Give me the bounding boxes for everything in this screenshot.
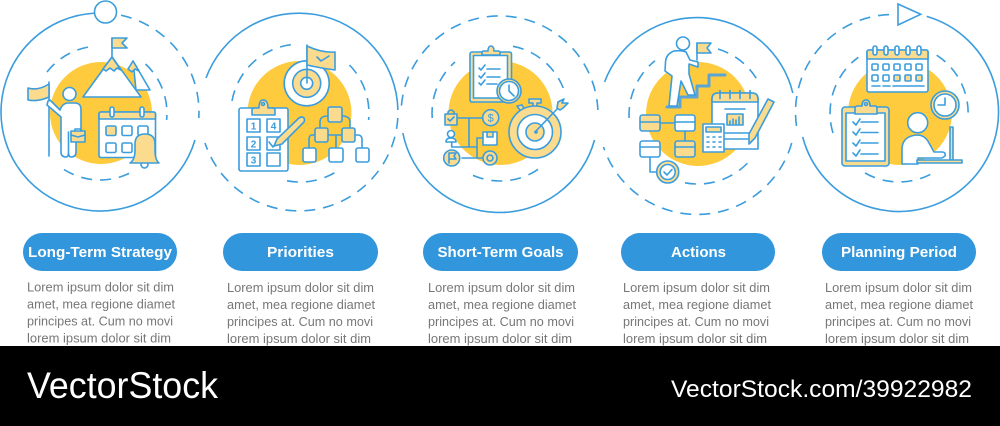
icon: hierarchy tree (303, 107, 369, 162)
text block: actions: amet, mea regione diamet (623, 297, 771, 312)
text block: priorities: amet, mea regione diamet (227, 297, 375, 312)
icon: person at laptop (902, 113, 962, 164)
label: priorities: Priorities (267, 244, 334, 261)
inner dashed ring (830, 55, 968, 182)
label: priorities (223, 233, 378, 271)
text block: priorities (227, 280, 375, 346)
text block: priorities: Lorem ipsum dolor sit dim (227, 280, 374, 295)
label: actions (621, 233, 775, 271)
icon: numbered checklist clipboard (239, 100, 288, 171)
inner dashed ring (232, 44, 369, 182)
panel: actions (604, 18, 793, 214)
icon: numbered checklist clipboard: 3 (251, 156, 257, 166)
text block: planning period: amet, mea regione diamet (825, 297, 973, 312)
icon: pencil (749, 99, 774, 144)
panel: long-term strategy (1, 1, 199, 211)
text block: long-term strategy: principes at. Cum no movi (27, 314, 173, 328)
label: actions: Actions (671, 244, 726, 261)
icon: stopwatch target with arrow (509, 99, 568, 158)
outer ring (401, 16, 598, 212)
icon: numbered checklist clipboard: 1 (251, 122, 257, 132)
text block: actions: Lorem ipsum dolor sit dim (623, 280, 770, 295)
icon: linked business items: $ (488, 112, 494, 124)
label: short-term goals: Short-Term Goals (438, 244, 564, 261)
icon: mountains with flag (83, 38, 150, 97)
icon: clipboard with clock (470, 46, 521, 103)
text block: priorities: lorem ipsum dolor sit dim (227, 331, 371, 346)
icon: pen (274, 117, 304, 146)
icon: checklist clipboard (842, 100, 889, 166)
icon: target with flag (284, 45, 335, 106)
icon: stairs (667, 75, 725, 107)
text block: long-term strategy (27, 280, 175, 346)
footer band (0, 346, 1000, 426)
label: long-term strategy: Long-Term Strategy (28, 244, 173, 261)
step marker triangle (898, 4, 921, 25)
icon: numbered checklist clipboard: 4 (271, 122, 277, 132)
step marker circle (94, 1, 116, 23)
text block: short-term goals: principes at. Cum no movi (428, 314, 574, 329)
yellow backdrop circle (646, 62, 750, 166)
inner dashed ring (432, 46, 564, 181)
panel: priorities (205, 13, 398, 211)
yellow backdrop circle (848, 61, 952, 165)
outer ring (796, 15, 998, 211)
text block: actions (623, 280, 771, 346)
icon: flow chart with check (640, 115, 695, 183)
icon: calendar report (712, 90, 758, 149)
text block: long-term strategy: lorem ipsum dolor sit dim (27, 330, 171, 346)
yellow backdrop circle (448, 61, 552, 165)
yellow backdrop circle (50, 62, 152, 164)
text block: short-term goals: lorem ipsum dolor sit dim (428, 331, 572, 346)
icon: person climbing with flag (665, 37, 711, 106)
yellow backdrop circle (248, 61, 352, 165)
icon: calendar (99, 107, 156, 158)
icon: calculator (703, 124, 724, 152)
outer ring (604, 18, 793, 214)
label: short-term goals (423, 233, 578, 271)
footer brand wordmark: VectorStock (27, 365, 218, 406)
text block: planning period: principes at. Cum no movi (825, 314, 971, 329)
outer ring (1, 13, 199, 211)
inner dashed ring (629, 49, 757, 184)
text block: actions: lorem ipsum dolor sit dim (623, 331, 767, 346)
text block: short-term goals (428, 280, 576, 346)
icon: numbered checklist clipboard: 2 (251, 140, 257, 150)
text block: priorities: principes at. Cum no movi (227, 314, 373, 329)
text block: planning period (825, 280, 973, 346)
text block: short-term goals: Lorem ipsum dolor sit dim (428, 280, 575, 295)
text block: planning period: Lorem ipsum dolor sit dim (825, 280, 972, 295)
label: planning period (822, 233, 976, 271)
footer image id: VectorStock.com/39922982 (671, 376, 972, 403)
label: planning period: Planning Period (841, 244, 957, 261)
text block: actions: principes at. Cum no movi (623, 314, 769, 329)
icon: linked business items (444, 110, 499, 166)
icon: calendar (867, 46, 928, 92)
panel: planning period (796, 4, 998, 211)
icon: person with flag (28, 82, 85, 157)
icon: wall clock (931, 91, 959, 119)
text block: long-term strategy: Lorem ipsum dolor sit dim (27, 280, 174, 294)
label: long-term strategy (23, 233, 177, 271)
text block: short-term goals: amet, mea regione diamet (428, 297, 576, 312)
text block: planning period: lorem ipsum dolor sit dim (825, 331, 969, 346)
panel: short-term goals (401, 16, 598, 212)
text block: long-term strategy: amet, mea regione diamet (27, 296, 175, 312)
inner dashed ring (47, 46, 167, 180)
icon: bell (130, 134, 159, 168)
outer ring (205, 13, 398, 211)
